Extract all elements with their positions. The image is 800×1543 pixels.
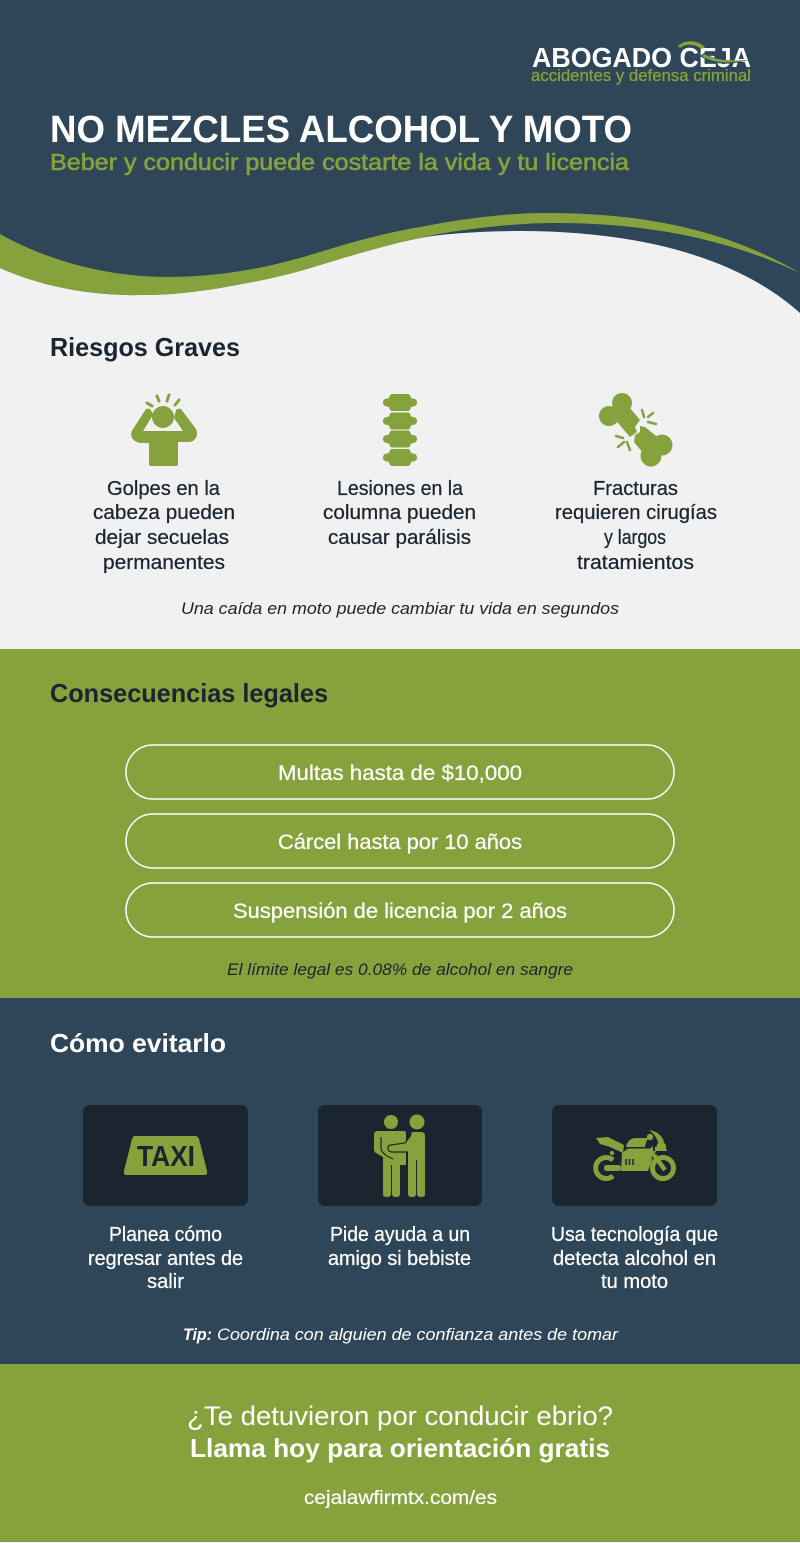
text: fractures: tratamientos xyxy=(577,552,694,574)
title: NO MEZCLES ALCOHOL Y MOTO xyxy=(50,109,632,151)
logo xyxy=(531,41,751,85)
heading: Cómo evitarlo: Cómo evitarlo xyxy=(50,1028,226,1058)
text: use technology: tu moto xyxy=(601,1271,668,1293)
text: plan ahead: salir xyxy=(147,1271,184,1293)
card: taxi: TAXI xyxy=(137,1141,195,1173)
tip: Tip: xyxy=(183,1325,212,1344)
text: head injuries: cabeza pueden xyxy=(93,502,235,524)
text: spine injuries: causar parálisis xyxy=(328,527,471,549)
text: ask a friend xyxy=(328,1224,471,1270)
text: fractures: y largos xyxy=(604,527,666,549)
panel: risks background with curved top xyxy=(0,231,800,649)
tip: Coordina con alguien de confianza antes de tomar xyxy=(217,1325,619,1344)
text: use technology: detecta alcohol en xyxy=(553,1248,716,1270)
panel: header background xyxy=(0,0,800,330)
text: ask a friend: amigo si bebiste xyxy=(328,1248,471,1270)
text: head injuries: dejar secuelas xyxy=(95,527,229,549)
pill: license: Suspensión de licencia por 2 años xyxy=(233,900,567,923)
text: head injuries: permanentes xyxy=(103,552,225,574)
note: legal limit: El límite legal es 0.08% de alcohol en sangre xyxy=(227,960,573,979)
text: spine injuries xyxy=(323,478,476,549)
card: taxi xyxy=(83,1105,248,1206)
pill: fines xyxy=(126,745,674,799)
logo: ABOGADO CEJA xyxy=(532,42,751,73)
text: fractures: requieren cirugías xyxy=(555,502,717,524)
logo: accidentes y defensa criminal xyxy=(531,66,751,85)
panel: legal consequences xyxy=(0,649,800,998)
note: risks: Una caída en moto puede cambiar tu vida en segundos xyxy=(181,599,620,618)
pill: jail xyxy=(126,814,674,868)
text: head injuries xyxy=(93,478,235,574)
icon: broken bone xyxy=(599,393,672,466)
question: ¿Te detuvieron por conducir ebrio? xyxy=(187,1401,613,1431)
text: plan ahead xyxy=(88,1224,243,1293)
pill: jail: Cárcel hasta por 10 años xyxy=(278,831,522,854)
text: fractures xyxy=(555,478,717,574)
text: spine injuries: columna pueden xyxy=(323,502,476,524)
icon: spine xyxy=(383,394,417,466)
text: use technology: Usa tecnología que xyxy=(551,1224,718,1246)
subtitle: Beber y conducir puede costarte la vida y tu licencia xyxy=(50,149,629,175)
icon: head injury xyxy=(131,395,197,466)
text: plan ahead: Planea cómo xyxy=(109,1224,222,1246)
text: spine injuries: Lesiones en la xyxy=(337,478,464,500)
text: plan ahead: regresar antes de xyxy=(88,1248,243,1270)
website: cejalawfirmtx.com/es xyxy=(304,1488,497,1509)
card: friends xyxy=(318,1105,482,1206)
text: head injuries: Golpes en la xyxy=(107,478,221,500)
green swoosh xyxy=(0,213,800,295)
text: use technology xyxy=(551,1224,718,1293)
pill: fines: Multas hasta de $10,000 xyxy=(278,762,522,785)
text: ask a friend: Pide ayuda a un xyxy=(330,1224,470,1246)
call to action line: Llama hoy para orientación gratis xyxy=(190,1433,610,1463)
card: motorcycle xyxy=(552,1105,717,1206)
panel: call to action xyxy=(0,1364,800,1542)
pill: license xyxy=(126,883,674,937)
heading: Consecuencias legales: Consecuencias legales xyxy=(50,678,328,708)
heading: Riesgos Graves: Riesgos Graves xyxy=(50,332,240,362)
text: fractures: Fracturas xyxy=(593,478,678,500)
panel: how to avoid xyxy=(0,998,800,1364)
